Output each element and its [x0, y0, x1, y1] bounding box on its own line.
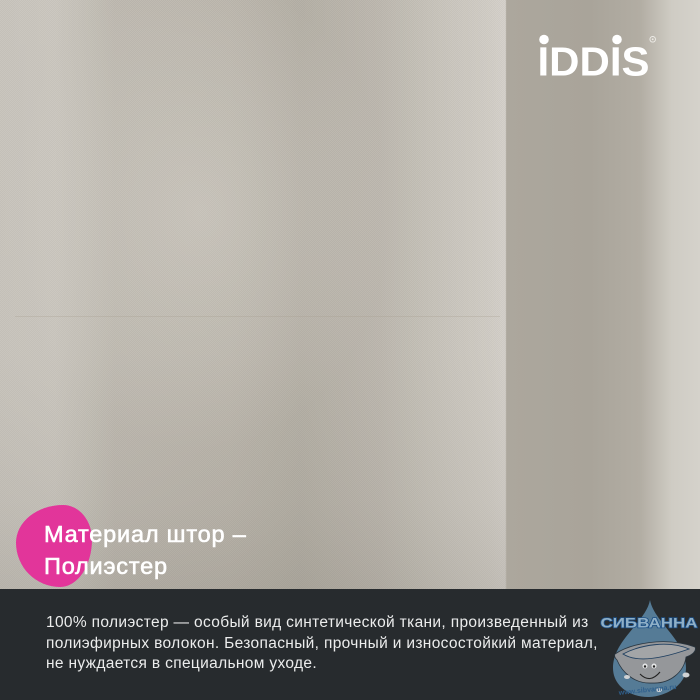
pink blob accent	[16, 505, 92, 587]
bathtub face	[642, 664, 648, 668]
description text	[46, 614, 598, 672]
heading	[44, 521, 247, 580]
heading: Материал штор –	[44, 521, 247, 547]
bathtub feet	[624, 675, 630, 679]
bathtub	[615, 642, 695, 692]
water drop	[613, 600, 686, 697]
watermark wordmark: СИБВАННА	[600, 614, 698, 630]
watermark url: www.sibvanna.ru	[617, 684, 677, 697]
watermark: Sibvanna logo	[600, 600, 698, 697]
dark description panel	[0, 589, 700, 700]
heading: Полиэстер	[44, 552, 168, 578]
description text: полиэфирных волокон. Безопасный, прочный и износостойкий материал,	[46, 634, 598, 652]
logo: IDDIS	[538, 34, 656, 80]
description text: 100% полиэстер — особый вид синтетической ткани, произведенный из	[46, 614, 589, 631]
description text: не нуждается в специальном уходе.	[46, 655, 317, 672]
